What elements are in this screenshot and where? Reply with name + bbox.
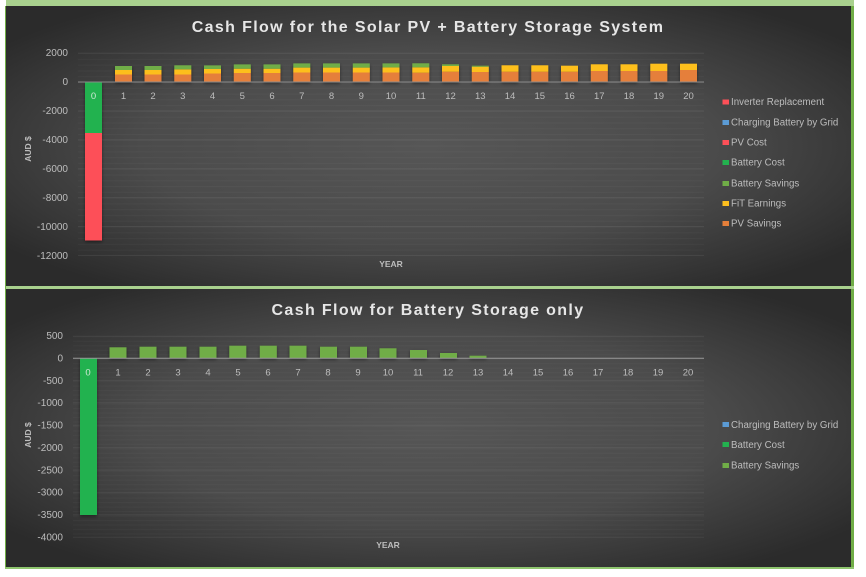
x axis labels: 11 (416, 91, 426, 102)
legend: solar PV plus battery: PV Savings (731, 218, 782, 230)
legend: solar PV plus battery (722, 97, 838, 230)
x axis labels: 10 (386, 91, 396, 102)
y axis title: AUD $ (23, 422, 33, 448)
x axis labels: 18 (624, 91, 634, 102)
chart title: solar PV plus battery: Cash Flow for the Solar PV + Battery Storage System (192, 19, 664, 36)
y axis labels: -1500 (37, 420, 63, 432)
legend: solar PV plus battery: PV Cost (731, 138, 767, 148)
y axis labels: -6000 (42, 164, 68, 175)
year 15 bar (531, 65, 548, 82)
x axis labels: 8 (329, 91, 334, 102)
year 8 bar (323, 63, 340, 82)
x axis labels: 4 (205, 368, 211, 378)
x axis labels: 3 (180, 91, 185, 102)
x axis labels: 17 (594, 91, 605, 102)
x axis labels: 8 (325, 368, 331, 378)
panel: battery storage cash flow (6, 289, 851, 567)
x axis labels: 19 (654, 91, 664, 102)
x axis labels: 7 (299, 91, 304, 102)
year 14 bar (502, 65, 518, 82)
legend: battery storage: Battery Savings (731, 460, 799, 472)
y axis labels: -2000 (42, 106, 68, 117)
divider between panels (6, 286, 854, 289)
legend: solar PV plus battery: Battery Cost (731, 158, 785, 168)
x axis title: YEAR (376, 540, 400, 550)
legend: solar PV plus battery: Inverter Replacement (731, 97, 824, 108)
year 0 bar (85, 82, 102, 240)
panel: solar PV plus battery cash flow (6, 6, 851, 286)
year 13 bar (472, 66, 489, 82)
x axis labels: 9 (359, 91, 364, 102)
x axis labels: 17 (593, 368, 603, 378)
y axis labels: 0 (57, 354, 63, 364)
x axis labels: 13 (475, 91, 486, 102)
legend: battery storage: Battery Cost (731, 440, 785, 451)
year 16 bar (561, 66, 578, 82)
x axis labels: 6 (269, 91, 275, 102)
year 2 bar (144, 66, 162, 82)
x axis labels: 15 (535, 91, 545, 102)
x axis labels: 4 (210, 91, 215, 102)
legend: battery storage: Charging Battery by Grid (731, 420, 838, 431)
x axis labels: 1 (121, 91, 126, 102)
x axis labels: 12 (443, 368, 453, 378)
year 7 bar (293, 63, 310, 82)
x axis labels: 20 (683, 368, 693, 378)
y axis labels: -12000 (37, 251, 68, 262)
x axis labels: 5 (235, 368, 241, 378)
y axis labels (37, 331, 63, 544)
year 3 bar (174, 65, 191, 82)
x axis labels: 18 (623, 368, 633, 378)
x axis labels: 16 (563, 368, 573, 378)
chart title: battery storage: Cash Flow for Battery Storage only (272, 302, 584, 319)
y axis labels: -2500 (37, 466, 63, 476)
y axis labels: 500 (46, 331, 63, 342)
x axis labels: 11 (413, 368, 423, 378)
x axis labels: 14 (505, 91, 515, 102)
legend: solar PV plus battery: Battery Savings (731, 178, 799, 190)
y axis labels: -4000 (42, 135, 68, 146)
y axis labels (37, 48, 68, 262)
y axis labels: -2000 (37, 443, 63, 454)
legend: solar PV plus battery: Charging Battery by Grid (731, 118, 838, 128)
x axis labels: 9 (355, 368, 361, 378)
x axis labels: 7 (295, 368, 301, 378)
x axis labels: 20 (683, 91, 694, 102)
x axis labels: 3 (175, 368, 181, 378)
year 6 bar (264, 64, 280, 82)
year 17 bar (591, 64, 608, 82)
y axis labels: -500 (43, 376, 63, 387)
y axis labels: -4000 (37, 532, 63, 544)
x axis labels: 2 (150, 91, 156, 102)
year 20 bar (680, 64, 697, 82)
y axis title: AUD $ (23, 136, 33, 162)
year 9 bar (353, 63, 370, 82)
x axis labels (85, 368, 693, 378)
year 12 bar (442, 64, 459, 82)
x axis labels: 5 (240, 91, 245, 102)
x axis labels: 19 (653, 368, 663, 378)
x axis labels: 6 (265, 368, 271, 378)
x axis labels: 16 (564, 91, 575, 102)
y axis labels: -3000 (37, 488, 63, 498)
x axis labels: 1 (115, 368, 121, 378)
y axis labels: -8000 (42, 193, 68, 204)
x axis labels: 10 (383, 368, 393, 378)
year 5 bar (234, 64, 251, 82)
x axis labels: 14 (503, 368, 513, 378)
stacked bars (85, 63, 697, 240)
x axis labels: 0 (85, 368, 91, 378)
year 19 bar (650, 64, 667, 82)
x axis labels: 15 (533, 368, 543, 378)
y axis labels: -1000 (37, 398, 63, 409)
x axis labels: 2 (145, 368, 151, 378)
year 10 bar (382, 63, 400, 82)
x axis labels: 0 (91, 91, 96, 102)
x axis labels: 13 (473, 368, 483, 378)
year 11 bar (412, 63, 429, 82)
x axis title: YEAR (379, 259, 403, 269)
bottom border (5, 567, 854, 569)
year 18 bar (620, 64, 638, 82)
legend: solar PV plus battery: FiT Earnings (731, 198, 786, 210)
legend: battery storage (722, 420, 838, 472)
y axis labels: -3500 (37, 510, 63, 521)
x axis labels (91, 91, 694, 102)
y axis labels: 0 (62, 77, 68, 88)
x axis labels: 12 (445, 91, 456, 102)
year 1 bar (115, 66, 132, 82)
bars (80, 346, 486, 515)
y axis labels: 2000 (46, 48, 68, 59)
y axis labels: -10000 (37, 222, 68, 233)
year 4 bar (204, 65, 221, 82)
